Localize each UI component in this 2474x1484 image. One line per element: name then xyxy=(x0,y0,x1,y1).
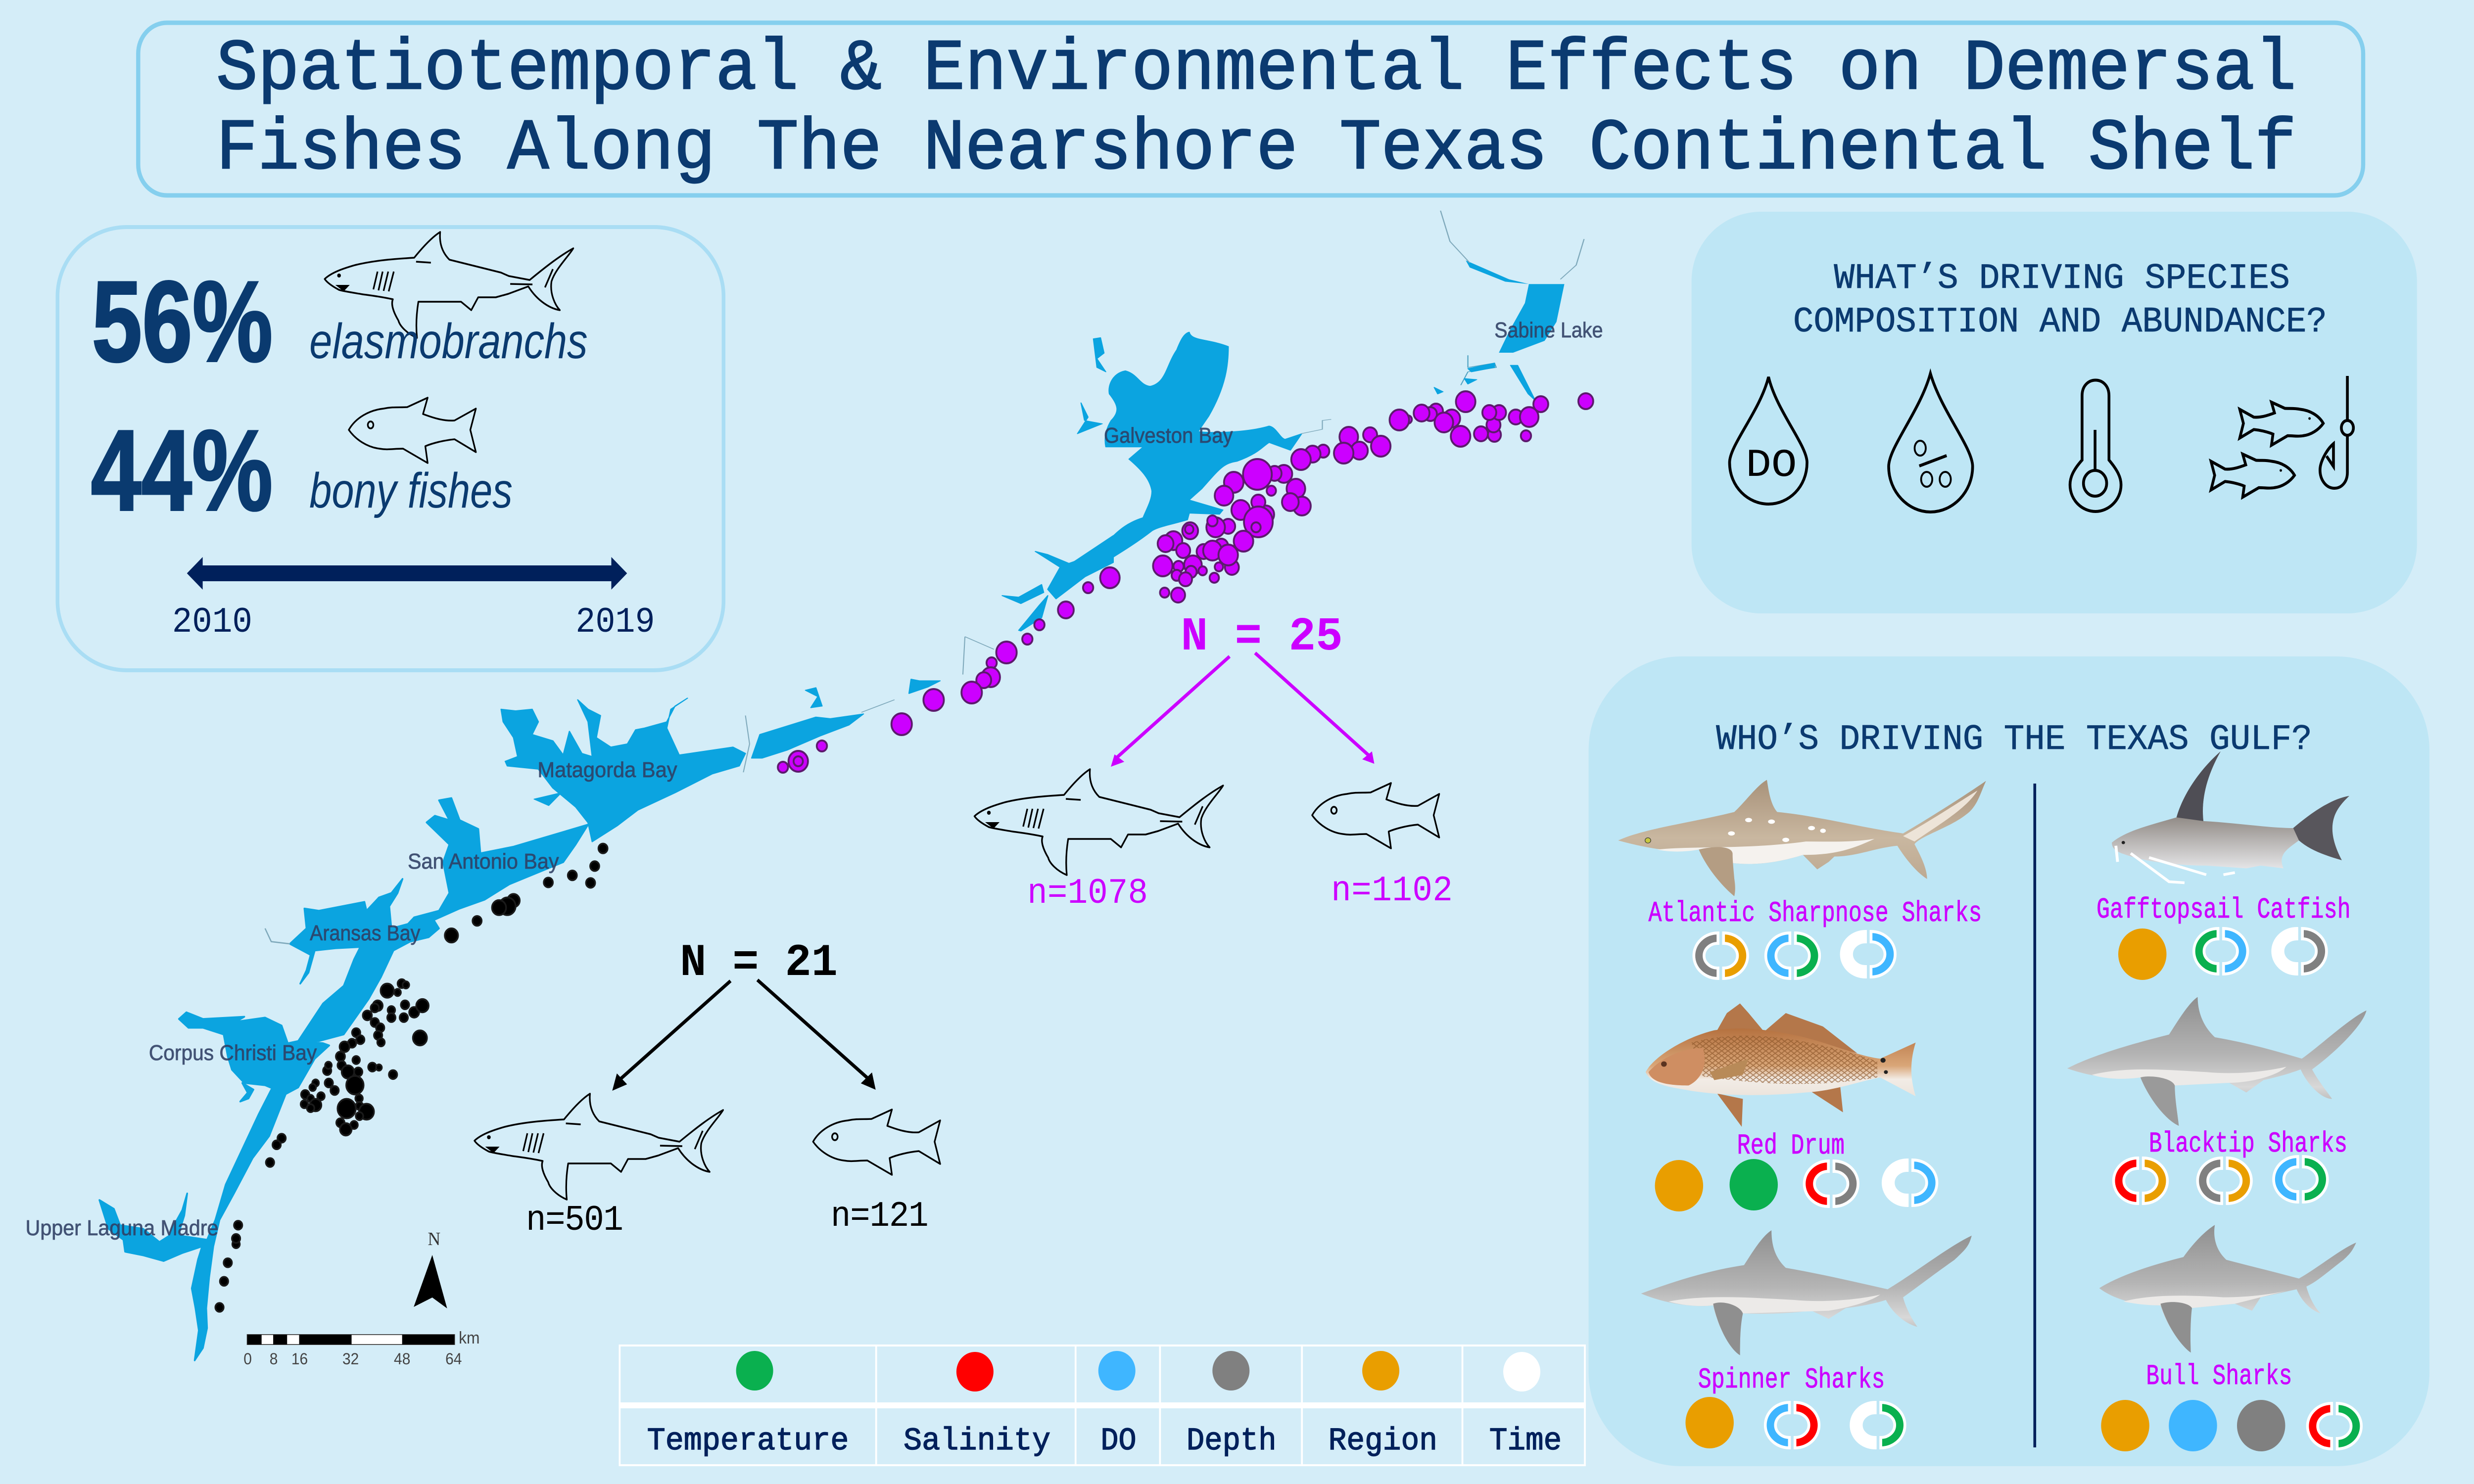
legend: region: Region xyxy=(1329,1423,1437,1459)
north arrow xyxy=(414,1228,447,1308)
title: Fishes Along The Nearshore Texas Continental Shelf xyxy=(216,108,2296,190)
label: Galveston Bay: Galveston Bay xyxy=(1104,423,1233,448)
legend: DO: DO xyxy=(1100,1423,1137,1459)
panel: what's driving species composition and abundance xyxy=(1692,212,2417,613)
icon: shark outline xyxy=(475,1094,723,1200)
species: red drum xyxy=(1646,1004,1937,1211)
scale bar: 32 xyxy=(342,1350,359,1368)
label: Atlantic Sharpnose Sharks xyxy=(1648,897,1982,930)
label: Red Drum xyxy=(1737,1130,1845,1162)
bays: Galveston Bay xyxy=(1067,332,1535,586)
label: Matagorda Bay: Matagorda Bay xyxy=(537,758,677,782)
scale bar: km xyxy=(459,1328,480,1347)
title: Spatiotemporal & Environmental Effects on Demersal xyxy=(216,29,2296,110)
indicator: salinity and temperature xyxy=(2307,1403,2361,1449)
icon: shark outline xyxy=(325,232,573,338)
arrow to shark xyxy=(1111,656,1230,767)
arrow: 2010 to 2019 xyxy=(187,557,627,590)
indicator: depth xyxy=(2237,1400,2285,1451)
scale bar: 0 xyxy=(243,1350,252,1368)
icon: thermometer xyxy=(2070,380,2121,511)
illustration: bull shark xyxy=(2099,1225,2356,1352)
legend: temperature: Temperature xyxy=(647,1423,849,1459)
legend: temperature xyxy=(647,1351,849,1459)
species: gafftopsail catfish xyxy=(2096,751,2351,980)
legend: DO xyxy=(1098,1351,1137,1459)
illustration: spinner shark xyxy=(1641,1230,1972,1355)
sampling sites: purple (north) xyxy=(778,391,1593,773)
tree: N = 21 (south) xyxy=(475,937,940,1241)
arrow to fish xyxy=(758,980,876,1090)
indicator: time and temperature xyxy=(1851,1402,1905,1448)
scale bar: 16 xyxy=(291,1350,308,1368)
legend: time: Time xyxy=(1489,1423,1562,1459)
panel: elasmobranchs vs bony fishes xyxy=(57,227,723,670)
indicator: region xyxy=(2118,928,2167,980)
indicator: time and depth xyxy=(2273,928,2327,974)
icon: fishes and hook xyxy=(2211,376,2353,497)
legend table xyxy=(618,1345,1586,1465)
legend: depth xyxy=(1187,1351,1277,1459)
icon: shark outline xyxy=(974,769,1223,875)
label: n=501: n=501 xyxy=(526,1200,623,1241)
arrow to shark xyxy=(612,981,730,1091)
label: Bull Sharks xyxy=(2146,1360,2292,1393)
indicator: salinity and depth xyxy=(1804,1161,1858,1206)
icon: dissolved oxygen drop: DO xyxy=(1746,443,1797,488)
illustration: blacktip shark xyxy=(2067,997,2367,1126)
scale bar: 8 xyxy=(270,1350,278,1368)
heading xyxy=(1793,258,2327,342)
tree: N = 25 (north) xyxy=(974,610,1453,914)
sampling sites: black (south) xyxy=(215,843,608,1312)
indicator: region xyxy=(2101,1400,2149,1451)
indicator: salinity and region xyxy=(2114,1158,2167,1204)
label: n=1102: n=1102 xyxy=(1331,871,1453,911)
icon: fish outline xyxy=(349,398,476,463)
label: Spinner Sharks xyxy=(1698,1364,1885,1396)
heading: COMPOSITION AND ABUNDANCE? xyxy=(1793,302,2327,342)
legend: salinity xyxy=(904,1352,1050,1459)
species: blacktip shark xyxy=(2067,997,2367,1204)
label: Sabine Lake: Sabine Lake xyxy=(1494,318,1603,342)
indicator: DO and temperature xyxy=(1766,933,1819,978)
label: 2019: 2019 xyxy=(575,602,655,643)
label: bony fishes: bony fishes xyxy=(309,463,513,518)
count: N = 21: N = 21 xyxy=(680,937,838,989)
indicator: DO and salinity xyxy=(1765,1402,1819,1448)
indicator: depth and region xyxy=(1694,933,1748,978)
label: Corpus Christi Bay: Corpus Christi Bay xyxy=(149,1041,317,1065)
icon: fish outline xyxy=(813,1110,940,1175)
arrow to fish xyxy=(1255,653,1374,764)
map: Texas coast bays xyxy=(26,211,1603,1368)
icon: dissolved oxygen drop xyxy=(1730,377,1807,504)
label: n=1078: n=1078 xyxy=(1027,873,1148,914)
icon: fish outline xyxy=(1312,783,1439,848)
bays: south section xyxy=(99,798,588,1360)
label: Upper Laguna Madre: Upper Laguna Madre xyxy=(26,1216,219,1240)
bays: Sabine Lake xyxy=(1440,211,1584,353)
heading: WHO’S DRIVING THE TEXAS GULF? xyxy=(1716,719,2312,760)
label: Aransas Bay: Aransas Bay xyxy=(310,921,421,945)
heading: WHAT’S DRIVING SPECIES xyxy=(1834,258,2290,299)
indicator: region xyxy=(1685,1397,1734,1448)
indicator: depth and region xyxy=(2197,1158,2251,1204)
indicator: temperature xyxy=(1730,1159,1778,1210)
illustration: gafftopsail catfish xyxy=(2112,751,2349,883)
indicator: time and DO xyxy=(1841,931,1895,977)
illustration: red drum xyxy=(1646,1004,1916,1127)
illustration: Atlantic sharpnose shark xyxy=(1618,780,1986,896)
statistic: 56%: 56% xyxy=(92,257,273,386)
species: spinner shark xyxy=(1641,1230,1972,1448)
statistic: 44%: 44% xyxy=(91,406,273,535)
legend: time xyxy=(1489,1352,1562,1459)
label: Gafftopsail Catfish xyxy=(2096,894,2351,927)
indicator: time and DO xyxy=(1883,1160,1937,1206)
legend: salinity: Salinity xyxy=(904,1423,1050,1459)
icon: salinity drop xyxy=(1889,373,1973,512)
label: San Antonio Bay: San Antonio Bay xyxy=(408,849,559,874)
legend: region xyxy=(1329,1351,1437,1459)
north arrow: N xyxy=(428,1228,440,1249)
panel: who's driving the Texas Gulf xyxy=(1589,656,2429,1466)
indicator: DO xyxy=(2169,1400,2217,1451)
legend: depth: Depth xyxy=(1187,1423,1277,1459)
indicator: temperature and DO xyxy=(2194,928,2248,974)
scale bar: 48 xyxy=(394,1350,410,1368)
count: N = 25: N = 25 xyxy=(1181,610,1343,664)
indicator: region xyxy=(1655,1160,1703,1211)
bays: central section xyxy=(501,536,1113,842)
label: n=121: n=121 xyxy=(831,1196,929,1237)
species: bull shark xyxy=(2099,1225,2361,1451)
title xyxy=(138,23,2363,195)
indicator: DO and temperature xyxy=(2274,1157,2328,1202)
label: Blacktip Sharks xyxy=(2149,1128,2347,1160)
scale bar: 64 xyxy=(445,1350,462,1368)
divider xyxy=(2033,784,2036,1447)
scale bar xyxy=(243,1328,480,1368)
species: Atlantic sharpnose shark xyxy=(1618,780,1986,978)
label: elasmobranchs: elasmobranchs xyxy=(309,313,588,369)
label: 2010: 2010 xyxy=(172,602,252,643)
